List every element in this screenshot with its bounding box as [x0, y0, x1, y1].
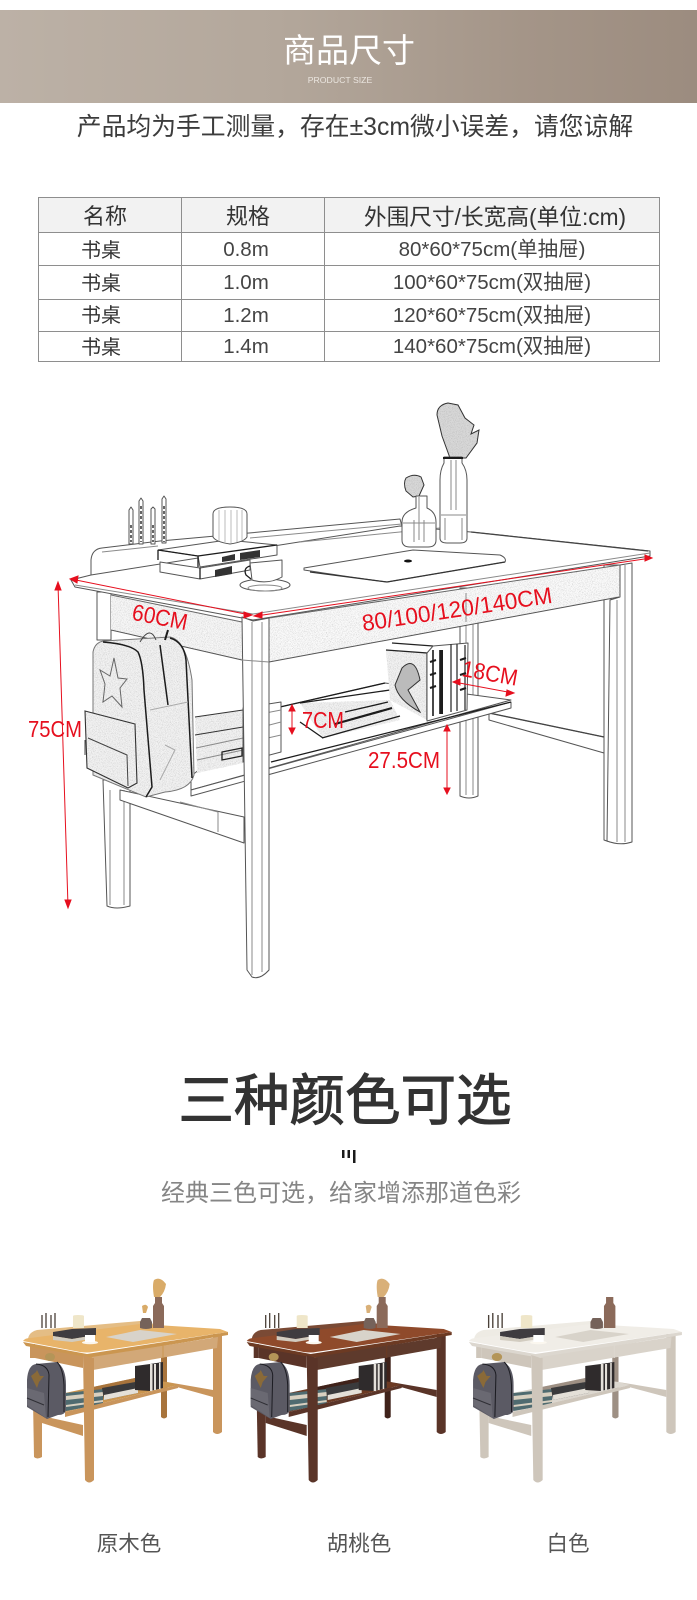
- row 1.4m: 书桌: [81, 337, 121, 359]
- sketch: tall vase with plant: [437, 403, 479, 543]
- label: 白色: 白色: [546, 1532, 590, 1556]
- sketch: lamp: [213, 507, 247, 544]
- sketch: drawer apron: [111, 565, 632, 662]
- row 1.2m: [81, 304, 591, 327]
- column head: 规格: 规格: [226, 204, 270, 229]
- row 1.0m: [81, 271, 591, 295]
- sketch: ledge: [91, 519, 403, 577]
- row 1.0m: 书桌: [81, 273, 121, 295]
- row 1.4m: [81, 335, 591, 359]
- sketch: upper-right leg face: [607, 563, 632, 844]
- desk: white: [469, 1297, 682, 1482]
- sketch: desk top: [71, 526, 650, 620]
- arrow: height: [55, 582, 71, 908]
- row 1.4m: 140*60*75cm(双抽屉): [393, 335, 591, 358]
- dimension sketch of desk: [28, 402, 654, 978]
- icon: small bars: [342, 1150, 356, 1163]
- subheading: PRODUCT SIZE: PRODUCT SIZE: [308, 75, 372, 85]
- heading: 商品尺寸: 商品尺寸: [283, 32, 415, 69]
- plants: walnut: [366, 1279, 390, 1313]
- subheading: color note: 经典三色可选，给家增添那道色彩: [161, 1180, 521, 1207]
- sketch: lower shelf with books: [191, 643, 511, 796]
- label: 18CM: 18CM: [460, 655, 520, 691]
- sketch: front leg: [242, 617, 269, 978]
- arrow: 60CM depth: [70, 576, 252, 618]
- arrow: 18CM shelf depth: [453, 679, 514, 696]
- row 1.0m: 1.0m: [223, 271, 269, 294]
- label: 80/100/120/140CM: 80/100/120/140CM: [360, 582, 554, 636]
- color desks: [23, 1278, 682, 1482]
- table header background: [38, 197, 660, 232]
- label: 75CM: 75CM: [28, 716, 82, 742]
- label: 27.5CM: 27.5CM: [368, 747, 440, 773]
- sketch: stretchers: [120, 713, 604, 843]
- heading: 三种颜色可选: 三种颜色可选: [178, 1070, 512, 1132]
- arrow: 7CM shelf height: [289, 705, 295, 734]
- label: 7CM: 7CM: [302, 707, 344, 733]
- label: 胡桃色: 胡桃色: [327, 1532, 391, 1556]
- note on measurement error: 产品均为手工测量，存在±3cm微小误差，请您谅解: [77, 114, 633, 141]
- sketch: coffee cup and saucer: [240, 560, 290, 591]
- sketch: small vase with plant: [402, 475, 436, 547]
- desk: walnut: [247, 1279, 452, 1482]
- plants: natural wood: [142, 1279, 166, 1313]
- column head: 名称: 名称: [83, 204, 127, 229]
- row 0.8m: 0.8m: [223, 238, 269, 261]
- sketch: laptop: [304, 550, 505, 582]
- row 1.2m: 120*60*75cm(双抽屉): [393, 304, 591, 327]
- size table: [38, 197, 660, 362]
- sketch: back legs: [97, 565, 629, 908]
- row 1.4m: 1.4m: [223, 335, 269, 358]
- sketch: backpack with star: [85, 630, 194, 797]
- label: 原木色: 原木色: [97, 1532, 161, 1556]
- row 1.2m: 1.2m: [223, 304, 269, 327]
- header band: [0, 10, 697, 103]
- row 0.8m: [81, 238, 585, 262]
- row 1.2m: 书桌: [81, 305, 121, 327]
- row 1.0m: 100*60*75cm(双抽屉): [393, 271, 591, 294]
- sketch: pens: [129, 496, 166, 544]
- row 0.8m: 80*60*75cm(单抽屉): [399, 238, 585, 261]
- row 0.8m: 书桌: [81, 240, 121, 262]
- label: 60CM: 60CM: [130, 599, 190, 635]
- desk: natural wood: [23, 1279, 228, 1482]
- arrow: width: [254, 555, 652, 618]
- sketch: stacked books: [158, 540, 277, 579]
- arrow: 27.5CM shelf clearance: [444, 725, 450, 794]
- column head: 外围尺寸: 外围尺寸/长宽高(单位:cm): [364, 204, 626, 230]
